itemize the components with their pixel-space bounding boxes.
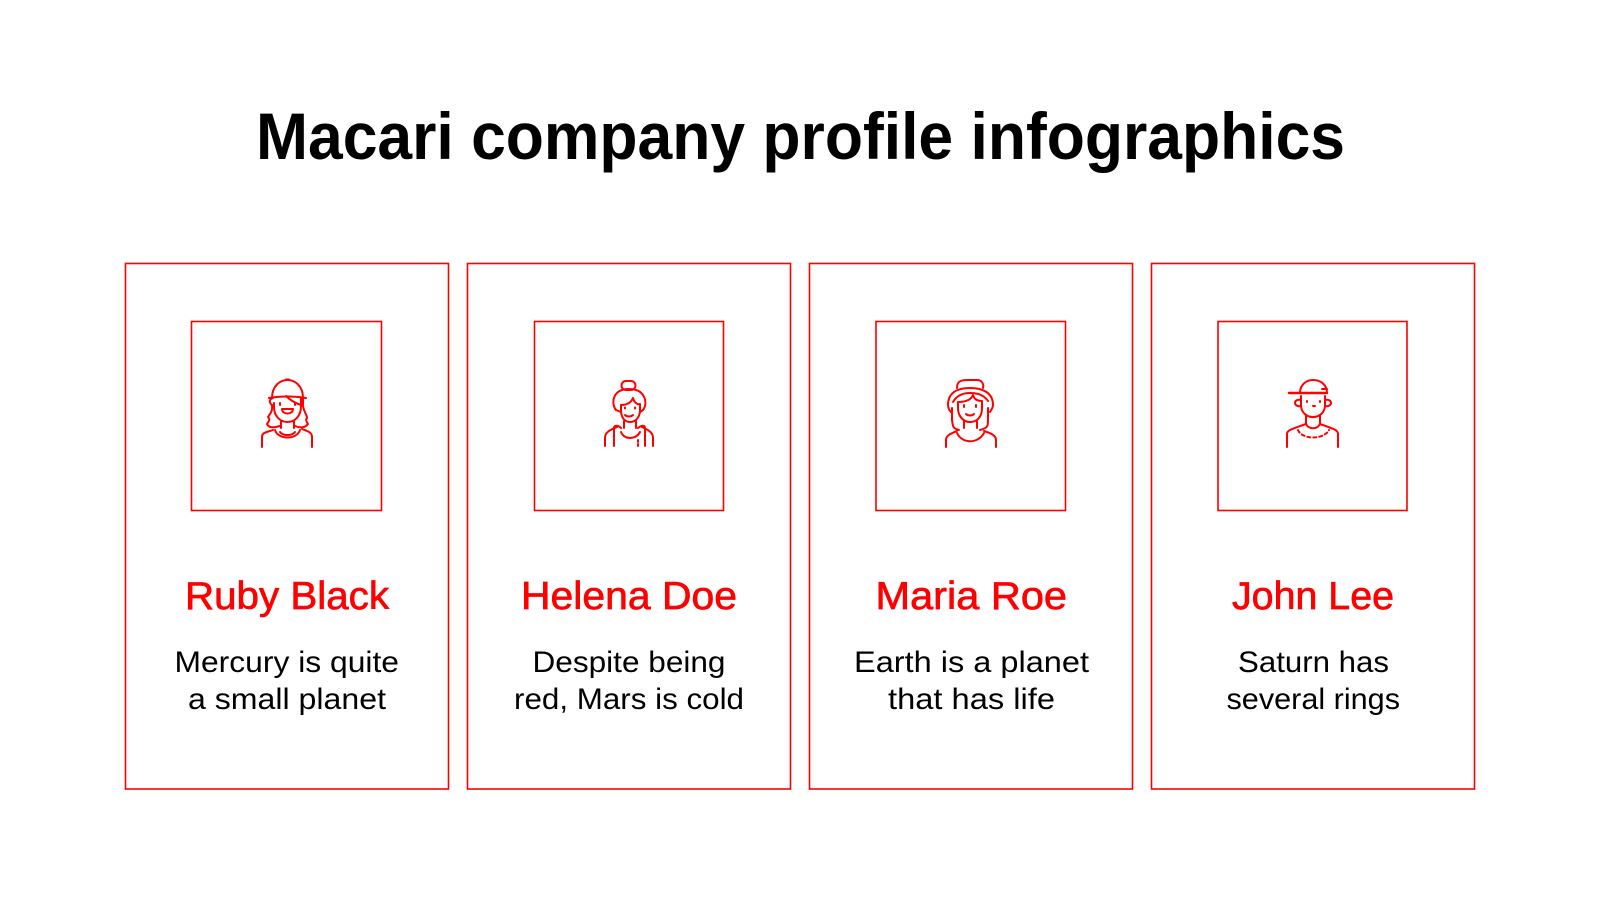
panel: Maria Roe	[810, 264, 1132, 789]
name: John Lee	[1232, 575, 1394, 618]
description: Earth is a planet	[854, 646, 1090, 679]
description: a small planet	[188, 683, 387, 716]
description	[174, 646, 399, 716]
panel: Helena Doe	[468, 264, 790, 789]
name: Maria Roe	[876, 575, 1067, 618]
description: Mercury is quite	[174, 646, 399, 679]
description: Saturn has	[1238, 646, 1389, 679]
icon: woman with cap	[262, 380, 312, 447]
card frame	[126, 264, 448, 789]
card frame	[1152, 264, 1474, 789]
title: Macari company profile infographics	[256, 99, 1345, 173]
icon frame	[534, 322, 724, 510]
description	[1226, 646, 1400, 716]
icon frame	[876, 322, 1066, 510]
name: Ruby Black	[185, 575, 390, 618]
description	[854, 646, 1090, 716]
description: several rings	[1226, 683, 1400, 716]
panel: Ruby Black	[126, 264, 448, 789]
icon: woman with bun and backpack	[605, 381, 653, 446]
icon: woman with hat	[946, 380, 996, 447]
panel: John Lee	[1152, 264, 1474, 789]
icon frame	[1218, 322, 1407, 510]
description: that has life	[888, 683, 1055, 716]
card frame	[468, 264, 790, 789]
card frame	[810, 264, 1132, 789]
icon: man with backwards cap	[1287, 380, 1338, 447]
description	[514, 646, 744, 716]
name: Helena Doe	[521, 575, 737, 618]
description: red, Mars is cold	[514, 683, 744, 716]
description: Despite being	[532, 646, 726, 679]
icon frame	[192, 322, 382, 510]
